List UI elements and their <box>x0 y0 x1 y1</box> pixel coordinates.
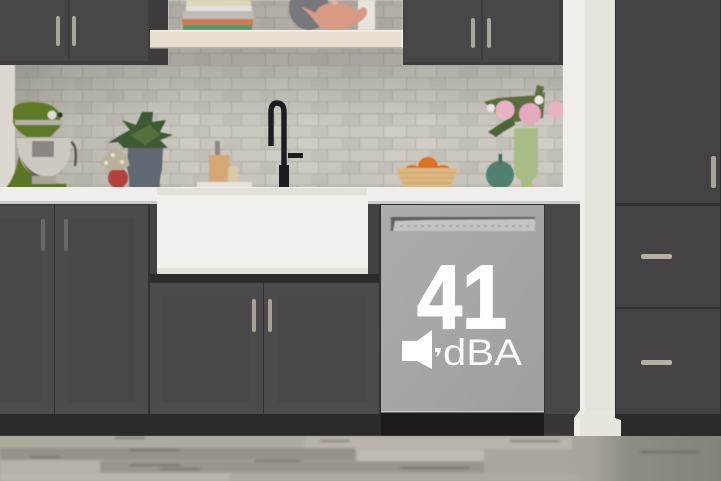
white pillar <box>563 0 621 455</box>
toe kick <box>0 414 721 436</box>
stand mixer <box>4 102 76 191</box>
soap dispenser <box>197 141 252 188</box>
unit label dBA: dBA <box>443 332 522 373</box>
green jar <box>486 154 514 189</box>
wood floor <box>0 436 721 481</box>
upper cabinet left <box>0 0 168 65</box>
small red vase with flowers <box>100 148 130 188</box>
black faucet <box>268 103 303 189</box>
fruit bowl <box>396 157 458 188</box>
vase with pink peonies <box>484 85 564 189</box>
books on shelf <box>182 0 254 30</box>
countertop <box>0 187 580 204</box>
backsplash wall <box>0 0 570 190</box>
potted plant <box>108 112 173 188</box>
dishwasher control strip <box>391 217 535 231</box>
striped bowl and teapot <box>289 0 375 30</box>
lower cabinetry <box>0 204 580 415</box>
floating shelf <box>150 30 402 48</box>
noise rating 41: 41 <box>417 248 507 348</box>
farmhouse sink <box>157 188 368 274</box>
sound wave mark <box>435 348 441 357</box>
tall cabinet right <box>615 0 721 415</box>
icon: speaker <box>402 330 432 369</box>
dishwasher <box>381 205 544 436</box>
upper cabinet right <box>403 0 568 65</box>
